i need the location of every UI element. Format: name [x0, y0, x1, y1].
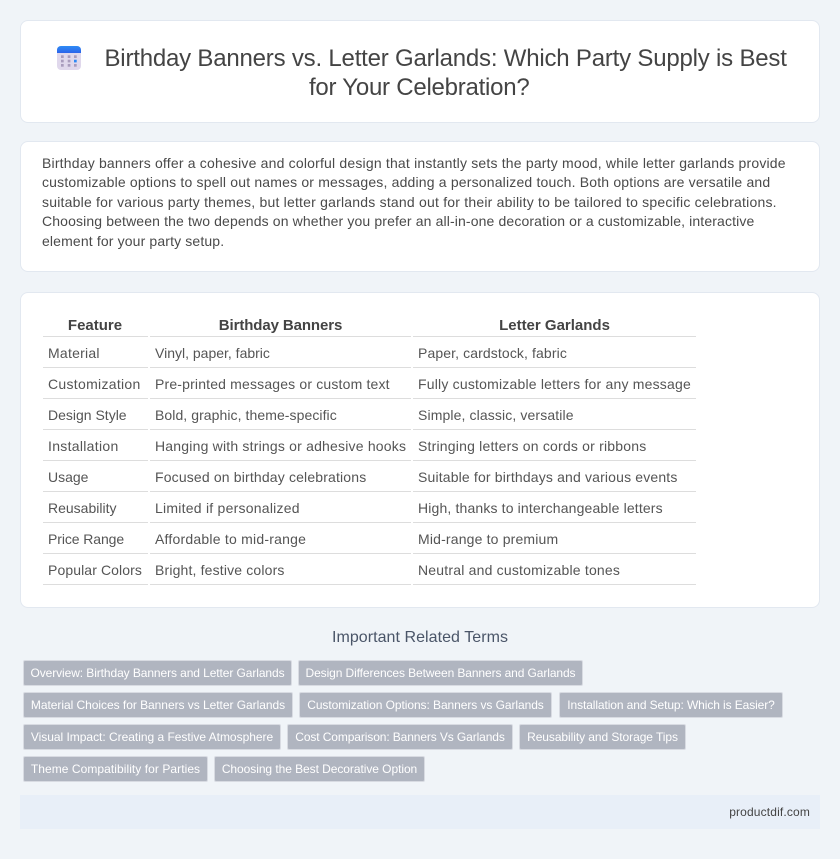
related terms tags: Overview: Birthday Banners and Letter Garlands [30, 666, 284, 680]
related terms tags: Design Differences Between Banners and Garlands [306, 666, 575, 680]
related terms tags: Cost Comparison: Banners Vs Garlands [295, 730, 505, 744]
related terms tags: Material Choices for Banners vs Letter Garlands [31, 698, 285, 712]
comparison table: Customization [48, 376, 141, 392]
comparison table: Vinyl, paper, fabric [155, 345, 270, 361]
intro text: Birthday banners offer a cohesive and colorful design that instantly sets the party mood, while letter garlands provide [42, 155, 786, 171]
related terms tags: Customization Options: Banners vs Garlands [307, 698, 544, 712]
related terms tags: Visual Impact: Creating a Festive Atmosphere [31, 730, 273, 744]
related terms tags [23, 660, 783, 782]
title: Birthday Banners vs. Letter Garlands: Which Party Supply is Best [104, 45, 787, 72]
comparison table: Affordable to mid-range [155, 531, 306, 547]
comparison table: Hanging with strings or adhesive hooks [155, 438, 406, 454]
comparison table: Birthday Banners [219, 317, 342, 334]
related terms tags: Choosing the Best Decorative Option [222, 762, 417, 776]
comparison table: Bold, graphic, theme-specific [155, 407, 337, 423]
comparison table: Bright, festive colors [155, 562, 285, 578]
intro text: Choosing between the two depends on whether you prefer an all-in-one decoration or a customizable, interactive [42, 213, 754, 229]
comparison table: Mid-range to premium [418, 531, 558, 547]
comparison table: Price Range [48, 531, 124, 547]
intro text: element for your party setup. [42, 233, 224, 249]
comparison table: Material [48, 345, 100, 361]
related terms tags: Reusability and Storage Tips [527, 730, 678, 744]
intro text [42, 155, 786, 249]
related terms heading: Important Related Terms [332, 629, 508, 646]
icon: calendar [57, 46, 81, 70]
intro text: suitable for various party themes, but letter garlands stand out for their ability to be tailored to specific celebrations. [42, 194, 777, 210]
intro text: customizable options to spell out names or messages, adding a personalized touch. Both options are versatile and [42, 174, 770, 190]
related terms tags: Installation and Setup: Which is Easier? [567, 698, 775, 712]
comparison table: Paper, cardstock, fabric [418, 345, 567, 361]
comparison table: Stringing letters on cords or ribbons [418, 438, 646, 454]
related terms tags: Theme Compatibility for Parties [31, 762, 200, 776]
comparison table: Suitable for birthdays and various events [418, 469, 677, 485]
comparison table: Simple, classic, versatile [418, 407, 574, 423]
footer source text: productdif.com [729, 805, 810, 819]
intro panel [20, 141, 820, 272]
comparison table: High, thanks to interchangeable letters [418, 500, 663, 516]
comparison table: Fully customizable letters for any message [418, 376, 691, 392]
comparison table: Reusability [48, 500, 116, 516]
comparison table: Feature [68, 317, 122, 334]
comparison table: Pre-printed messages or custom text [155, 376, 390, 392]
comparison table: Letter Garlands [499, 317, 610, 334]
comparison table: Neutral and customizable tones [418, 562, 620, 578]
comparison table: Limited if personalized [155, 500, 300, 516]
title [104, 45, 787, 101]
comparison table: Usage [48, 469, 88, 485]
comparison table panel [20, 292, 820, 608]
comparison table: Focused on birthday celebrations [155, 469, 366, 485]
header panel [20, 20, 820, 123]
comparison table [43, 317, 696, 585]
title: for Your Celebration? [309, 74, 529, 101]
comparison table: Popular Colors [48, 562, 142, 578]
footer bar [20, 795, 820, 829]
comparison table: Design Style [48, 407, 127, 423]
comparison table: Installation [48, 438, 119, 454]
